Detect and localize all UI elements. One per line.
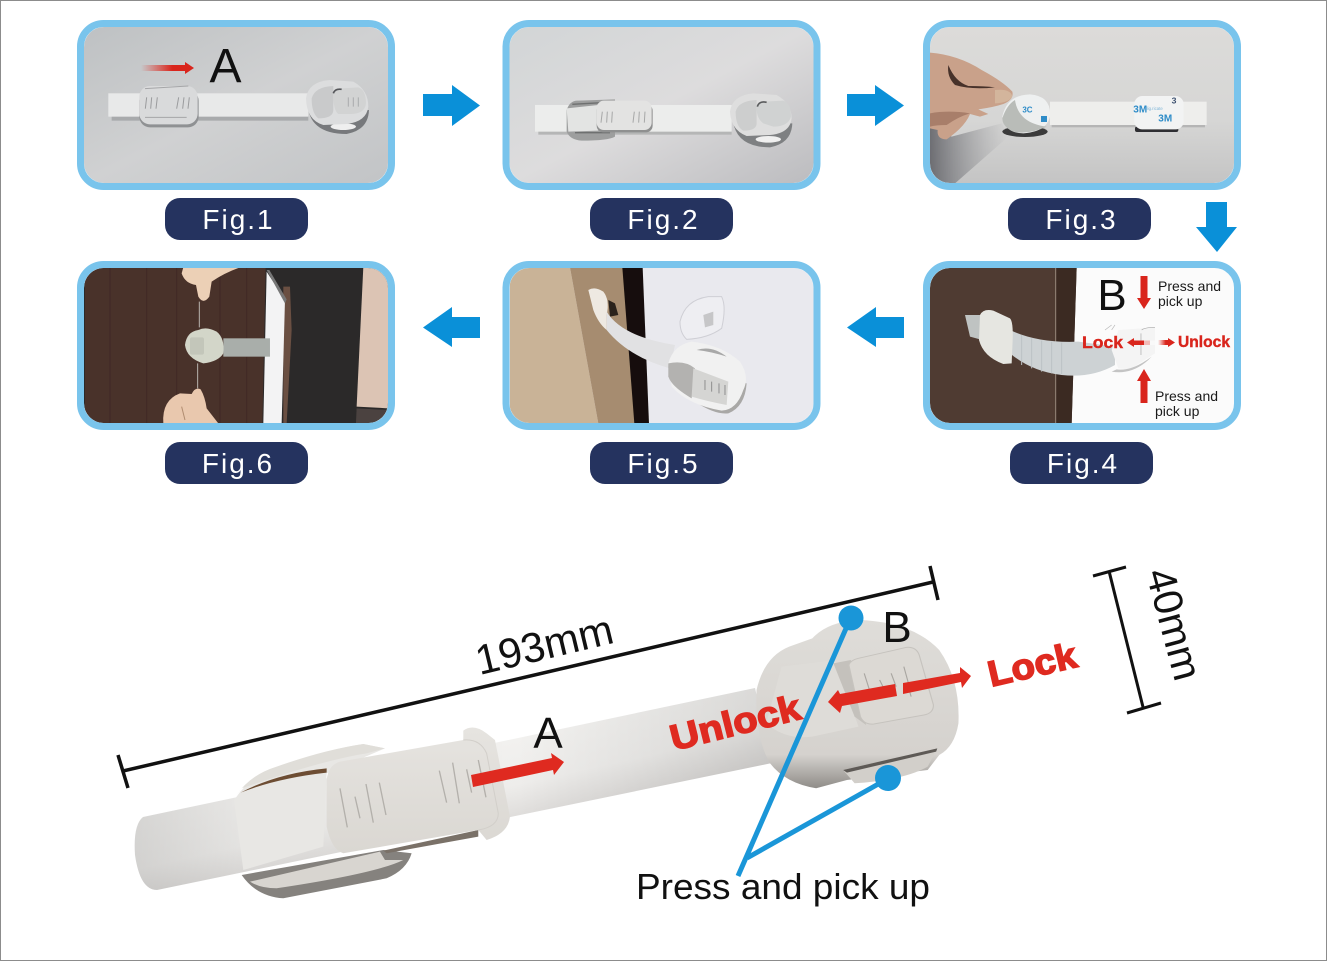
frame xyxy=(506,264,817,426)
text: 40mm: 40mm xyxy=(1137,563,1211,685)
callout dot: bottom xyxy=(875,765,901,791)
callout dot: top xyxy=(838,606,864,630)
arrow: to Fig.4 xyxy=(1196,202,1237,252)
panel: Fig.1 xyxy=(80,24,392,240)
panel: Fig.2 xyxy=(506,24,817,240)
photo: slider pushed to the right xyxy=(510,27,814,183)
label Fig.6 xyxy=(165,442,308,484)
photo: peeling 3M adhesive backing: 3C xyxy=(1022,106,1033,115)
callout lines: press and pick up xyxy=(738,617,889,876)
photo: strap mounted across door, white side xyxy=(930,268,1155,423)
label Fig.4 xyxy=(1010,442,1153,484)
frame xyxy=(506,24,817,186)
letter A: A xyxy=(209,40,242,93)
label Fig.3: Fig.3 xyxy=(1045,204,1118,235)
text: press and pick up (bottom): pick up xyxy=(1155,403,1200,419)
panel: Fig.5 xyxy=(506,264,817,484)
frame xyxy=(926,264,1238,426)
arrow: press up xyxy=(1137,369,1151,403)
frame xyxy=(80,264,392,426)
photo: peeling 3M adhesive backing: 3 xyxy=(1172,95,1177,105)
arrow: unlock direction xyxy=(828,684,897,713)
label Fig.2 xyxy=(590,198,733,240)
arrow: to Fig.2 xyxy=(423,85,480,126)
dimension: 193mm xyxy=(118,566,938,788)
arrow: lock direction xyxy=(1127,338,1156,347)
arrow: press down xyxy=(1137,276,1151,309)
strap xyxy=(135,688,772,890)
text: 193mm: 193mm xyxy=(471,605,618,684)
text: press and pick up (top): Press and xyxy=(1158,278,1221,294)
arrow: unlock direction xyxy=(1158,338,1175,347)
panel: Fig.4 xyxy=(926,264,1238,484)
dimension: 40mm xyxy=(1093,567,1161,713)
label Fig.3 xyxy=(1008,198,1151,240)
panel: Fig.3 xyxy=(926,24,1238,240)
panel: Fig.6 xyxy=(80,264,392,484)
text: Press and pick up: Press and pick up xyxy=(636,866,930,907)
label Fig.1 xyxy=(165,198,308,240)
text: press and pick up (bottom): Press and xyxy=(1155,388,1218,404)
photo: peeling 3M adhesive backing: 3M xyxy=(1158,113,1172,124)
arrow: to Fig.6 xyxy=(423,307,480,347)
label Fig.1: Fig.1 xyxy=(202,204,275,235)
label Fig.5: Fig.5 xyxy=(627,448,700,479)
label Fig.5 xyxy=(590,442,733,484)
label Fig.2: Fig.2 xyxy=(627,204,700,235)
label Fig.4: Fig.4 xyxy=(1047,448,1119,479)
photo: strap lock on grey surface xyxy=(84,27,388,183)
slider A xyxy=(234,728,510,898)
frame xyxy=(926,24,1238,186)
photo: strap lock holding door closed xyxy=(510,267,814,423)
text: Lock: Lock xyxy=(984,634,1082,695)
arrow: slide direction A xyxy=(471,753,564,787)
text: Unlock: Unlock xyxy=(666,686,806,758)
text: Lock: Lock xyxy=(1082,333,1124,352)
lock body B xyxy=(756,620,959,788)
arrow: slide direction A xyxy=(141,62,194,74)
letter A: A xyxy=(533,709,563,758)
label Fig.6: Fig.6 xyxy=(202,448,274,479)
text: Unlock: Unlock xyxy=(1178,334,1230,351)
arrow: to Fig.5 xyxy=(847,307,904,347)
frame xyxy=(80,24,392,186)
photo: peeling 3M adhesive backing: lig.ricate xyxy=(1147,106,1163,111)
arrow: to Fig.3 xyxy=(847,85,904,126)
photo: threading the line behind the lock on the door xyxy=(84,267,388,423)
text: press and pick up (top): pick up xyxy=(1158,293,1203,309)
photo: peeling 3M adhesive backing xyxy=(930,27,1234,183)
product diagram xyxy=(118,563,1211,907)
letter B: B xyxy=(1097,271,1127,320)
photo: peeling 3M adhesive backing: 3M xyxy=(1133,105,1147,116)
arrow: lock direction xyxy=(903,667,971,694)
letter B: B xyxy=(882,603,912,652)
